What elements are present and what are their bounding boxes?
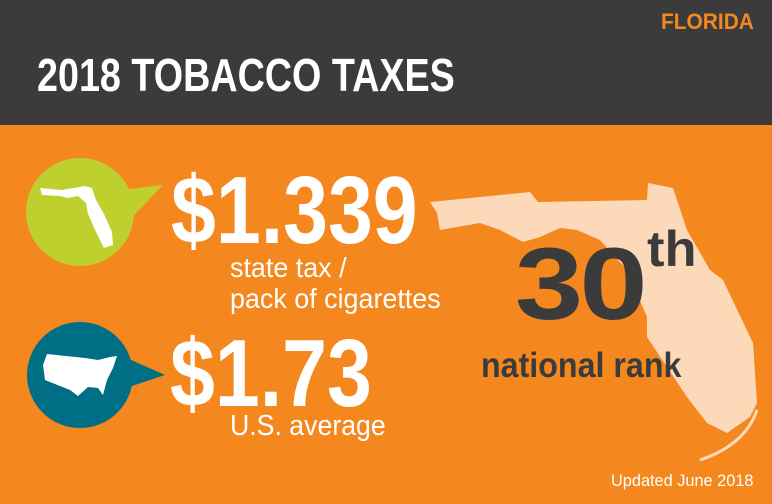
state tax label: pack of cigarettes <box>230 283 441 314</box>
state tax value: $1.339 <box>171 157 418 264</box>
updated note: Updated June 2018 <box>611 471 753 490</box>
label: FLORIDA: FLORIDA <box>661 9 754 34</box>
state tax label <box>230 252 441 314</box>
green circle with florida icon <box>26 158 163 266</box>
us average value: $1.73 <box>170 320 372 427</box>
state tax label: state tax / <box>230 252 347 283</box>
header bar <box>0 0 772 125</box>
rank label: national rank <box>481 346 681 385</box>
title: 2018 TOBACCO TAXES <box>37 49 455 101</box>
blue circle with us icon <box>27 322 165 428</box>
rank number: 30 <box>515 227 644 341</box>
us average label: U.S. average <box>230 410 386 442</box>
rank suffix: th <box>647 221 697 277</box>
large florida map <box>430 183 757 460</box>
